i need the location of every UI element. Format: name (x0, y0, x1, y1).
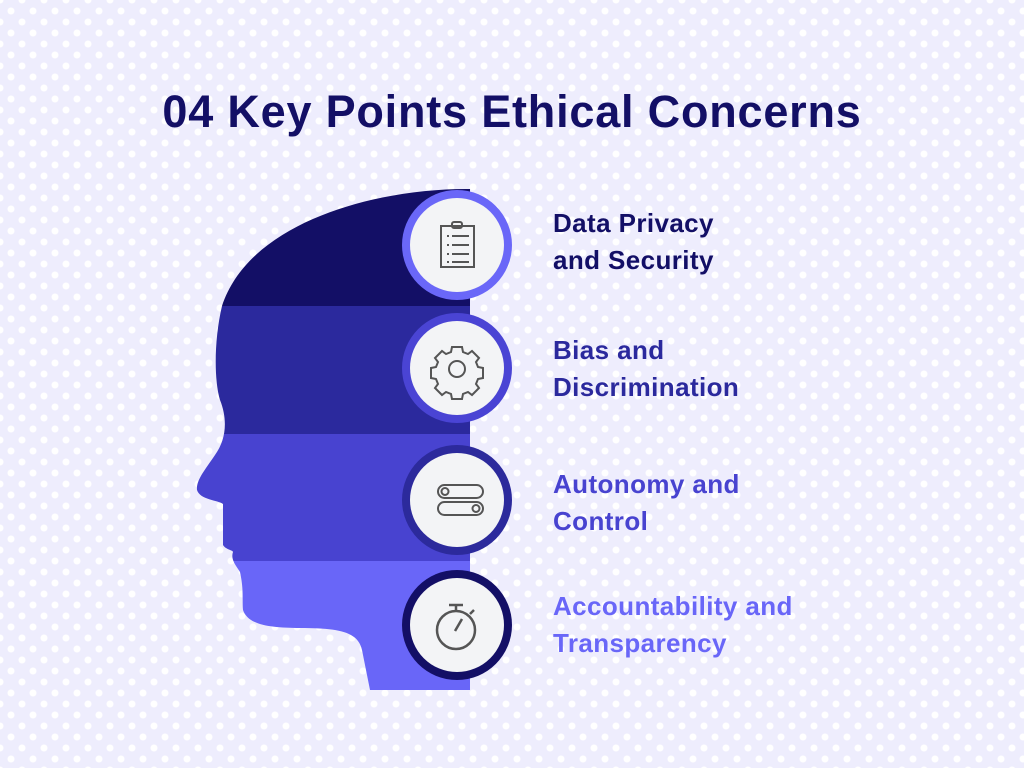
icon circle 4: stopwatch (402, 570, 512, 680)
label 3 (553, 469, 740, 536)
label 2: Bias and (553, 335, 665, 365)
label 1: Data Privacy (553, 208, 714, 238)
label 2 (553, 335, 739, 402)
label 4: Transparency (553, 628, 727, 658)
label 2: Discrimination (553, 372, 739, 402)
label 4 (553, 591, 793, 658)
label 3: Control (553, 506, 648, 536)
label 4: Accountability and (553, 591, 793, 621)
label 1 (553, 208, 714, 275)
icon circle 3: toggles (402, 445, 512, 555)
icon circle 1: clipboard (402, 190, 512, 300)
icon circle 2: gear (402, 313, 512, 423)
label 1: and Security (553, 245, 714, 275)
title: 04 Key Points Ethical Concerns (162, 86, 862, 137)
head graphic (196, 189, 512, 690)
label 3: Autonomy and (553, 469, 740, 499)
